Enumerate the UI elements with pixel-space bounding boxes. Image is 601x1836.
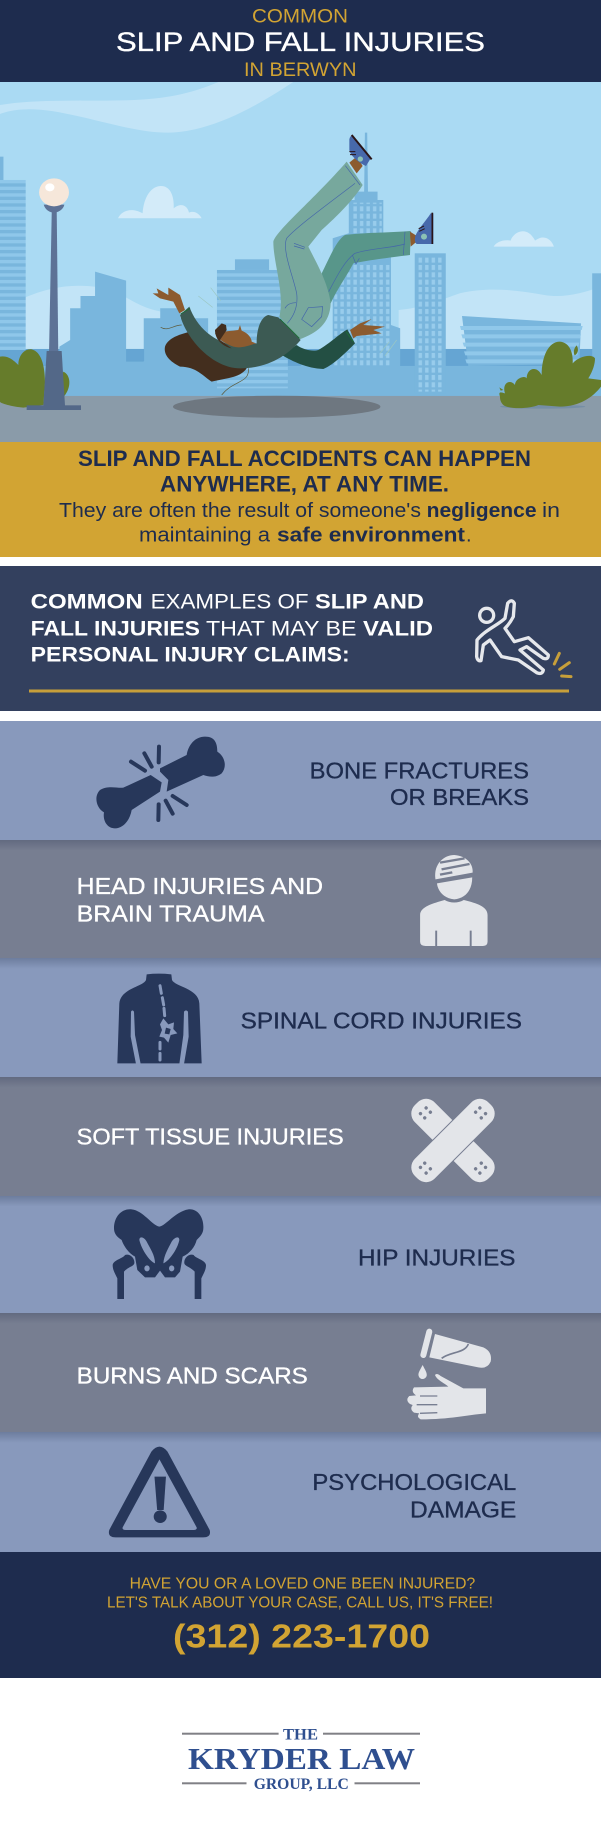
label: head injuries: BRAIN TRAUMA (77, 901, 265, 927)
intro heading: ANYWHERE, AT ANY TIME. (160, 472, 449, 497)
icon: pelvis (113, 1209, 206, 1299)
icon: bandaged head person (420, 855, 488, 946)
intro body text (59, 500, 560, 547)
label: spinal cord: SPINAL CORD INJURIES (241, 1007, 522, 1033)
clouds (118, 186, 554, 247)
icon: chemical dripping on hand (407, 1332, 491, 1419)
call to action text (107, 1575, 493, 1611)
icon: crossed bandages (406, 1093, 500, 1188)
examples heading: VALID (363, 618, 433, 641)
right bush (499, 342, 601, 409)
low-rise building (460, 316, 583, 366)
call to action footer (0, 1552, 601, 1678)
intro body text: maintaining a (139, 525, 271, 547)
logo: The Kryder Law Group (182, 1726, 420, 1793)
street lamp (27, 178, 81, 410)
examples heading: PERSONAL INJURY CLAIMS: (31, 644, 350, 667)
icon: falling person outline (477, 601, 571, 677)
background hills (26, 286, 592, 349)
label: bone fractures: BONE FRACTURES (310, 757, 529, 783)
illustration: woman slipping in city park (0, 82, 601, 443)
examples heading: COMMON (31, 590, 143, 613)
label: head injuries (77, 873, 323, 927)
ground (0, 396, 601, 443)
label: soft tissue: SOFT TISSUE INJURIES (77, 1123, 344, 1149)
examples heading (31, 590, 433, 667)
row: spinal cord (0, 958, 601, 1077)
logo: The Kryder Law Group: KRYDER LAW (188, 1741, 415, 1776)
sky wave (0, 82, 293, 133)
navy examples panel (0, 566, 601, 711)
phone number: (312) 223-1700 (173, 1617, 430, 1654)
icon: warning triangle (109, 1447, 210, 1537)
label: burns and scars: BURNS AND SCARS (77, 1363, 308, 1389)
intro body text: safe environment (277, 525, 465, 547)
logo: The Kryder Law Group: THE (283, 1726, 318, 1743)
gold intro panel (0, 442, 601, 557)
row: psychological damage (0, 1432, 601, 1552)
row: soft tissue (0, 1077, 601, 1196)
label: psychological damage: DAMAGE (410, 1497, 516, 1523)
label: bone fractures (310, 757, 529, 810)
intro heading (78, 446, 531, 497)
label: psychological damage: PSYCHOLOGICAL (312, 1469, 517, 1495)
header band (0, 0, 601, 82)
examples heading: FALL INJURIES (31, 618, 200, 641)
label: hip injuries: HIP INJURIES (358, 1245, 516, 1271)
falling person (153, 135, 433, 395)
header location: IN BERWYN (244, 60, 356, 81)
label: bone fractures: OR BREAKS (390, 784, 529, 810)
label: psychological damage (312, 1469, 517, 1523)
call to action text: HAVE YOU OR A LOVED ONE BEEN INJURED? (130, 1575, 476, 1592)
examples heading: THAT MAY BE (206, 618, 356, 641)
row: bone fractures (0, 721, 601, 840)
intro body text: They are often the result of someone's (59, 500, 421, 522)
icon: back with spine (117, 974, 202, 1064)
intro body text: . (466, 525, 472, 547)
logo: The Kryder Law Group: GROUP, LLC (254, 1776, 349, 1793)
intro body text: negligence (427, 500, 537, 522)
shadow under person (173, 396, 380, 418)
row: hip injuries (0, 1196, 601, 1313)
row: head injuries (0, 840, 601, 958)
call to action text: LET'S TALK ABOUT YOUR CASE, CALL US, IT'S FREE! (107, 1594, 493, 1611)
skyline (0, 133, 601, 400)
title: SLIP AND FALL INJURIES (116, 27, 485, 57)
examples heading: SLIP AND (315, 590, 424, 613)
label: head injuries: HEAD INJURIES AND (77, 873, 323, 899)
intro body text: in (542, 500, 560, 522)
row: burns and scars (0, 1313, 601, 1432)
header kicker: COMMON (252, 7, 348, 28)
examples heading: EXAMPLES OF (151, 590, 309, 613)
left bush (0, 349, 69, 408)
icon: broken bone (96, 737, 225, 828)
intro heading: SLIP AND FALL ACCIDENTS CAN HAPPEN (78, 446, 531, 471)
